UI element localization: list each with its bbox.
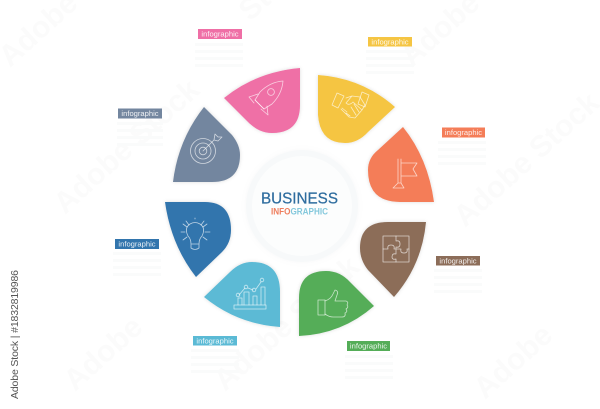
title: business: BUSINESS — [261, 190, 338, 208]
watermark text: Adobe Stock — [48, 73, 206, 220]
label: cyan: infographic — [196, 336, 234, 346]
center circle — [246, 150, 358, 262]
label: green: infographic — [350, 342, 387, 350]
subtitle: infographic: INFOGRAPHIC — [271, 206, 329, 216]
label: blue: infographic — [118, 240, 156, 248]
label: brown: infographic — [439, 256, 477, 266]
icon: target — [190, 134, 222, 164]
icon: flag — [393, 159, 417, 188]
watermark text: Adobe Stock — [208, 250, 366, 397]
panel: yellow handshake — [318, 75, 395, 143]
panel: blue bulb — [165, 202, 231, 277]
label: pink: infographic — [201, 30, 239, 38]
panel: pink rocket — [224, 68, 300, 133]
icon: bar chart — [234, 278, 266, 309]
icon: thumbs up — [318, 290, 348, 317]
side credit: Adobe Stock | #1832819986 — [9, 270, 21, 399]
icon: puzzle — [383, 236, 409, 262]
label: slate: infographic — [121, 109, 159, 118]
icon: rocket — [249, 81, 283, 115]
panel: green thumb — [299, 271, 374, 336]
panel: slate target — [173, 107, 240, 182]
panel: brown puzzle — [360, 222, 426, 297]
watermark text: Adobe — [468, 318, 559, 405]
label: orange: infographic — [445, 128, 482, 137]
watermark text: Adobe — [58, 310, 149, 397]
icon: handshake — [332, 92, 369, 118]
label: yellow: infographic — [371, 38, 409, 46]
icon: light bulb — [181, 218, 210, 250]
panel: cyan chart — [204, 262, 280, 327]
panel: orange flag — [368, 127, 434, 202]
